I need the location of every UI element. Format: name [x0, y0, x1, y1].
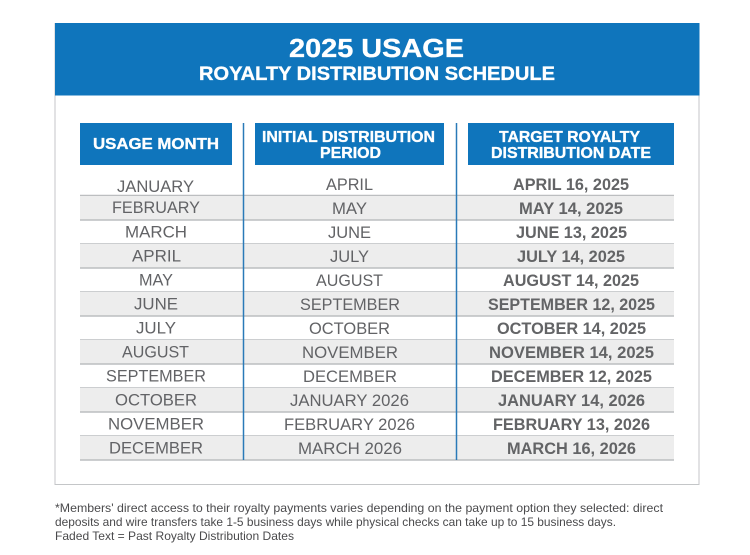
row: August — [80, 340, 674, 364]
footnote — [55, 501, 664, 543]
row: December: MARCH 2026 — [298, 440, 402, 458]
row: February — [80, 196, 674, 220]
row: March — [80, 224, 674, 244]
row: June — [80, 292, 674, 316]
footnote: *Members' direct access to their royalty payments varies depending on the payment option they selected: direct — [55, 501, 664, 515]
row: February: MAY — [332, 200, 367, 218]
title: 2025 USAGE — [289, 33, 464, 63]
row: January: JANUARY — [117, 178, 194, 196]
row: May: AUGUST 14, 2025 — [503, 272, 639, 290]
column divider: right — [456, 123, 458, 460]
row: March: MARCH — [125, 224, 187, 242]
row: July: OCTOBER — [309, 320, 390, 338]
row: May: AUGUST — [316, 272, 383, 290]
row: October: JANUARY 14, 2026 — [498, 392, 645, 410]
row: January — [80, 176, 674, 196]
column heading: target royalty distribution date — [468, 123, 674, 165]
row: April: JULY 14, 2025 — [517, 248, 625, 266]
row: August: NOVEMBER 14, 2025 — [489, 344, 654, 362]
row: April — [80, 244, 674, 268]
row: December: DECEMBER — [109, 440, 203, 458]
row: November: FEBRUARY 2026 — [284, 416, 415, 434]
column heading: initial distribution period: INITIAL DISTRIBUTION — [262, 129, 435, 146]
column heading: initial distribution period: PERIOD — [320, 145, 381, 162]
row: April: APRIL — [132, 248, 181, 266]
column heading: usage month: USAGE MONTH — [93, 136, 219, 153]
row: October — [80, 388, 674, 412]
row: September — [80, 368, 674, 388]
column heading: initial distribution period — [255, 123, 444, 165]
row: December: MARCH 16, 2026 — [507, 440, 636, 458]
row: November — [80, 416, 674, 436]
row: September: SEPTEMBER — [106, 368, 206, 386]
row: October: OCTOBER — [115, 392, 197, 410]
row: May — [80, 272, 674, 292]
row: April: JULY — [330, 248, 369, 266]
column divider: left — [242, 123, 244, 460]
row: November: NOVEMBER — [108, 416, 204, 434]
column heading: target royalty distribution date: DISTRIBUTION DATE — [491, 145, 651, 162]
row: January: APRIL — [326, 176, 373, 194]
column heading: target royalty distribution date: TARGET ROYALTY — [499, 129, 640, 146]
row: September: DECEMBER — [303, 368, 397, 386]
panel: schedule frame — [55, 24, 699, 484]
row: August: NOVEMBER — [302, 344, 398, 362]
row: August: AUGUST — [122, 344, 189, 362]
footnote: Faded Text = Past Royalty Distribution Dates — [55, 529, 294, 543]
column heading: usage month — [80, 123, 232, 165]
row: July: OCTOBER 14, 2025 — [497, 320, 646, 338]
row: December — [80, 436, 674, 460]
subtitle: ROYALTY DISTRIBUTION SCHEDULE — [199, 63, 555, 85]
row: November: FEBRUARY 13, 2026 — [493, 416, 650, 434]
row: January: APRIL 16, 2025 — [513, 176, 629, 194]
row: May: MAY — [139, 272, 173, 290]
header banner — [55, 23, 700, 96]
row: June: JUNE — [134, 296, 178, 314]
row: July: JULY — [136, 320, 176, 338]
row: March: JUNE — [328, 224, 371, 242]
row: September: DECEMBER 12, 2025 — [491, 368, 652, 386]
row: February: MAY 14, 2025 — [519, 200, 623, 218]
row: February: FEBRUARY — [112, 199, 200, 217]
row: July — [80, 320, 674, 340]
row: June: SEPTEMBER — [300, 296, 400, 314]
row: June: SEPTEMBER 12, 2025 — [488, 296, 655, 314]
footnote: deposits and wire transfers take 1-5 business days while physical checks can take up to 15 business days. — [55, 515, 616, 529]
row: March: JUNE 13, 2025 — [516, 224, 627, 242]
row: October: JANUARY 2026 — [290, 392, 409, 410]
